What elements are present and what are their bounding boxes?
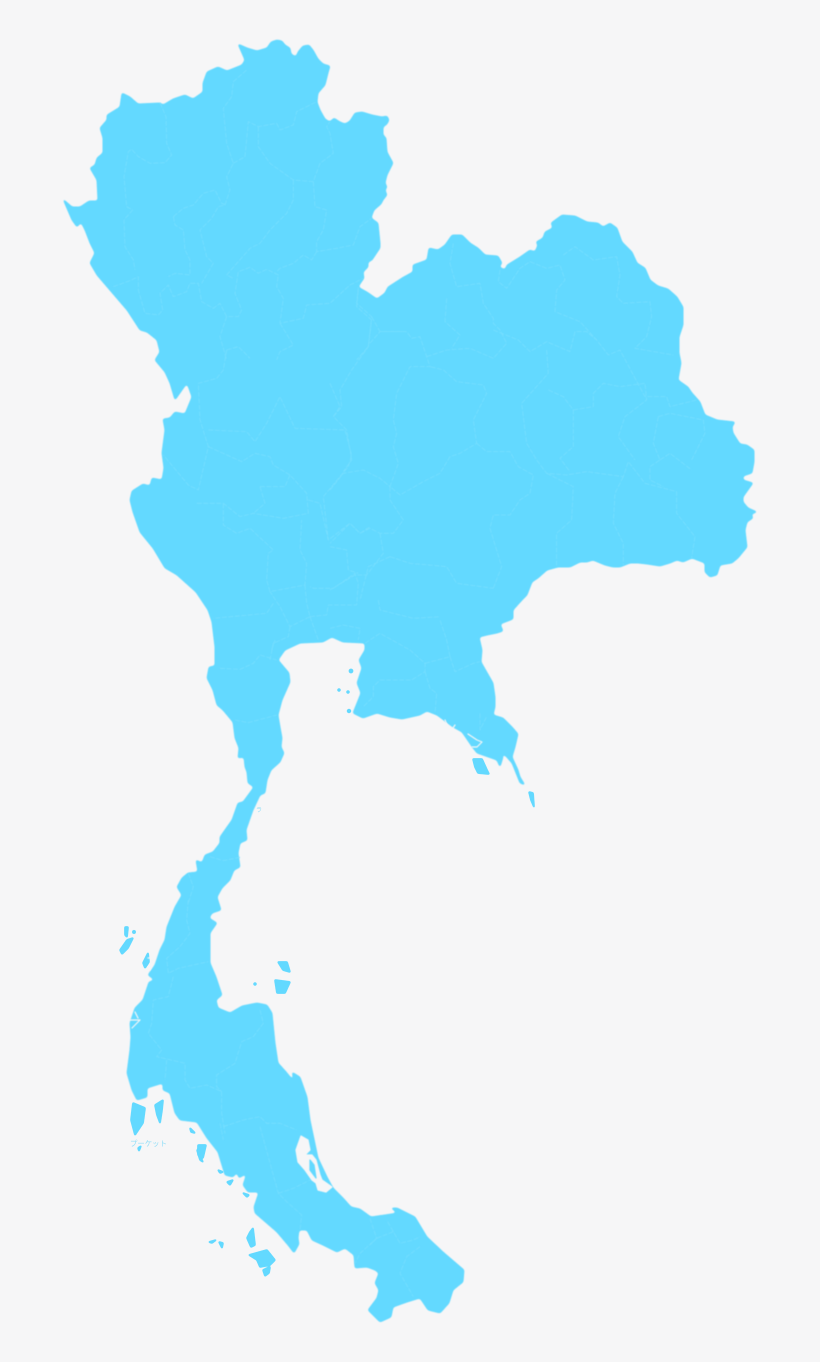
label: Phuket: プーケット bbox=[130, 1139, 167, 1148]
label: small katakana fragment: ラ bbox=[256, 807, 262, 814]
mainland silhouette bbox=[63, 40, 757, 1322]
offshore islands bbox=[120, 669, 534, 1276]
province borders bbox=[113, 70, 705, 1297]
Songkhla lake and coastal inlets bbox=[130, 720, 482, 1192]
